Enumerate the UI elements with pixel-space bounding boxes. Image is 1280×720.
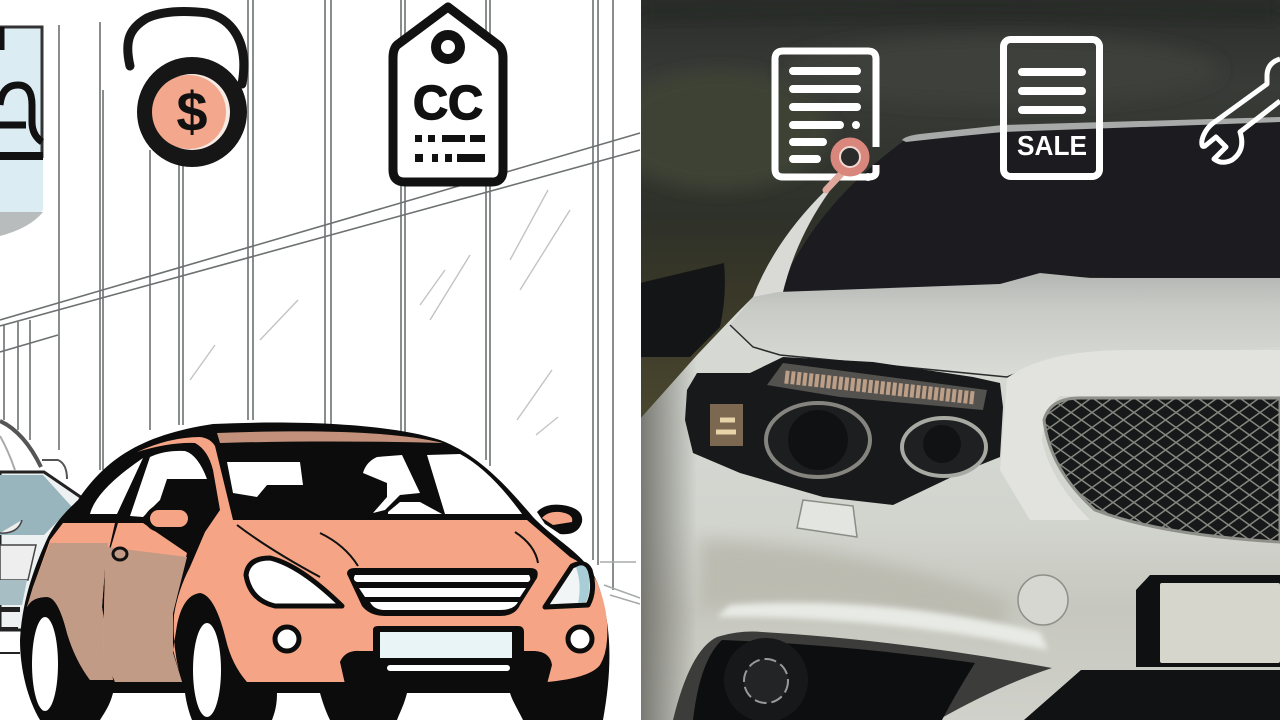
A-pillar [753,190,829,297]
side mirrors [144,503,197,533]
roof band [217,431,443,443]
icon: dollar coin with hanging loop [128,12,247,167]
car silhouette [20,423,609,720]
roof edge [902,117,1280,142]
orange body and hood [137,437,607,682]
icon: poster at left edge [0,27,43,236]
headlight [685,357,1003,505]
license plate [1136,575,1280,667]
bumper lip highlight [717,603,1048,650]
lower intake and plate [340,626,552,684]
icon: sale document [1004,40,1100,176]
icon: price tag [393,7,503,182]
panel: illustrated showroom [0,0,641,720]
icon: dollar coin with hanging loop: $ [176,80,208,143]
hood [731,273,1280,332]
door handle [113,548,127,560]
car bodywork [641,280,1280,720]
rear door panel [27,523,115,680]
left headlight [246,558,342,606]
panel: car photograph [610,0,1280,720]
lower bumper intake [673,632,1052,720]
fender [1000,350,1280,520]
hood creases [237,525,538,577]
illustration: orange car [20,423,609,720]
washer cap [797,500,857,537]
right headlight [545,564,593,607]
icon: price tag: CC [413,77,483,130]
windshield glass [227,454,522,514]
illustration: background car [0,421,82,654]
sensor [1018,575,1068,625]
lower center intake [1024,670,1280,720]
icon: document with magnifier [775,51,876,190]
front door panel [103,523,187,682]
wheels [32,617,58,711]
magnifier [826,142,865,190]
windshield [778,122,1280,293]
icon: sale document: SALE [1017,130,1087,161]
icon: wrench [1202,59,1280,162]
fog lights [275,627,299,651]
front grille [1044,398,1280,542]
side mirror [640,263,725,357]
grille [347,568,538,616]
side windows [90,451,207,517]
